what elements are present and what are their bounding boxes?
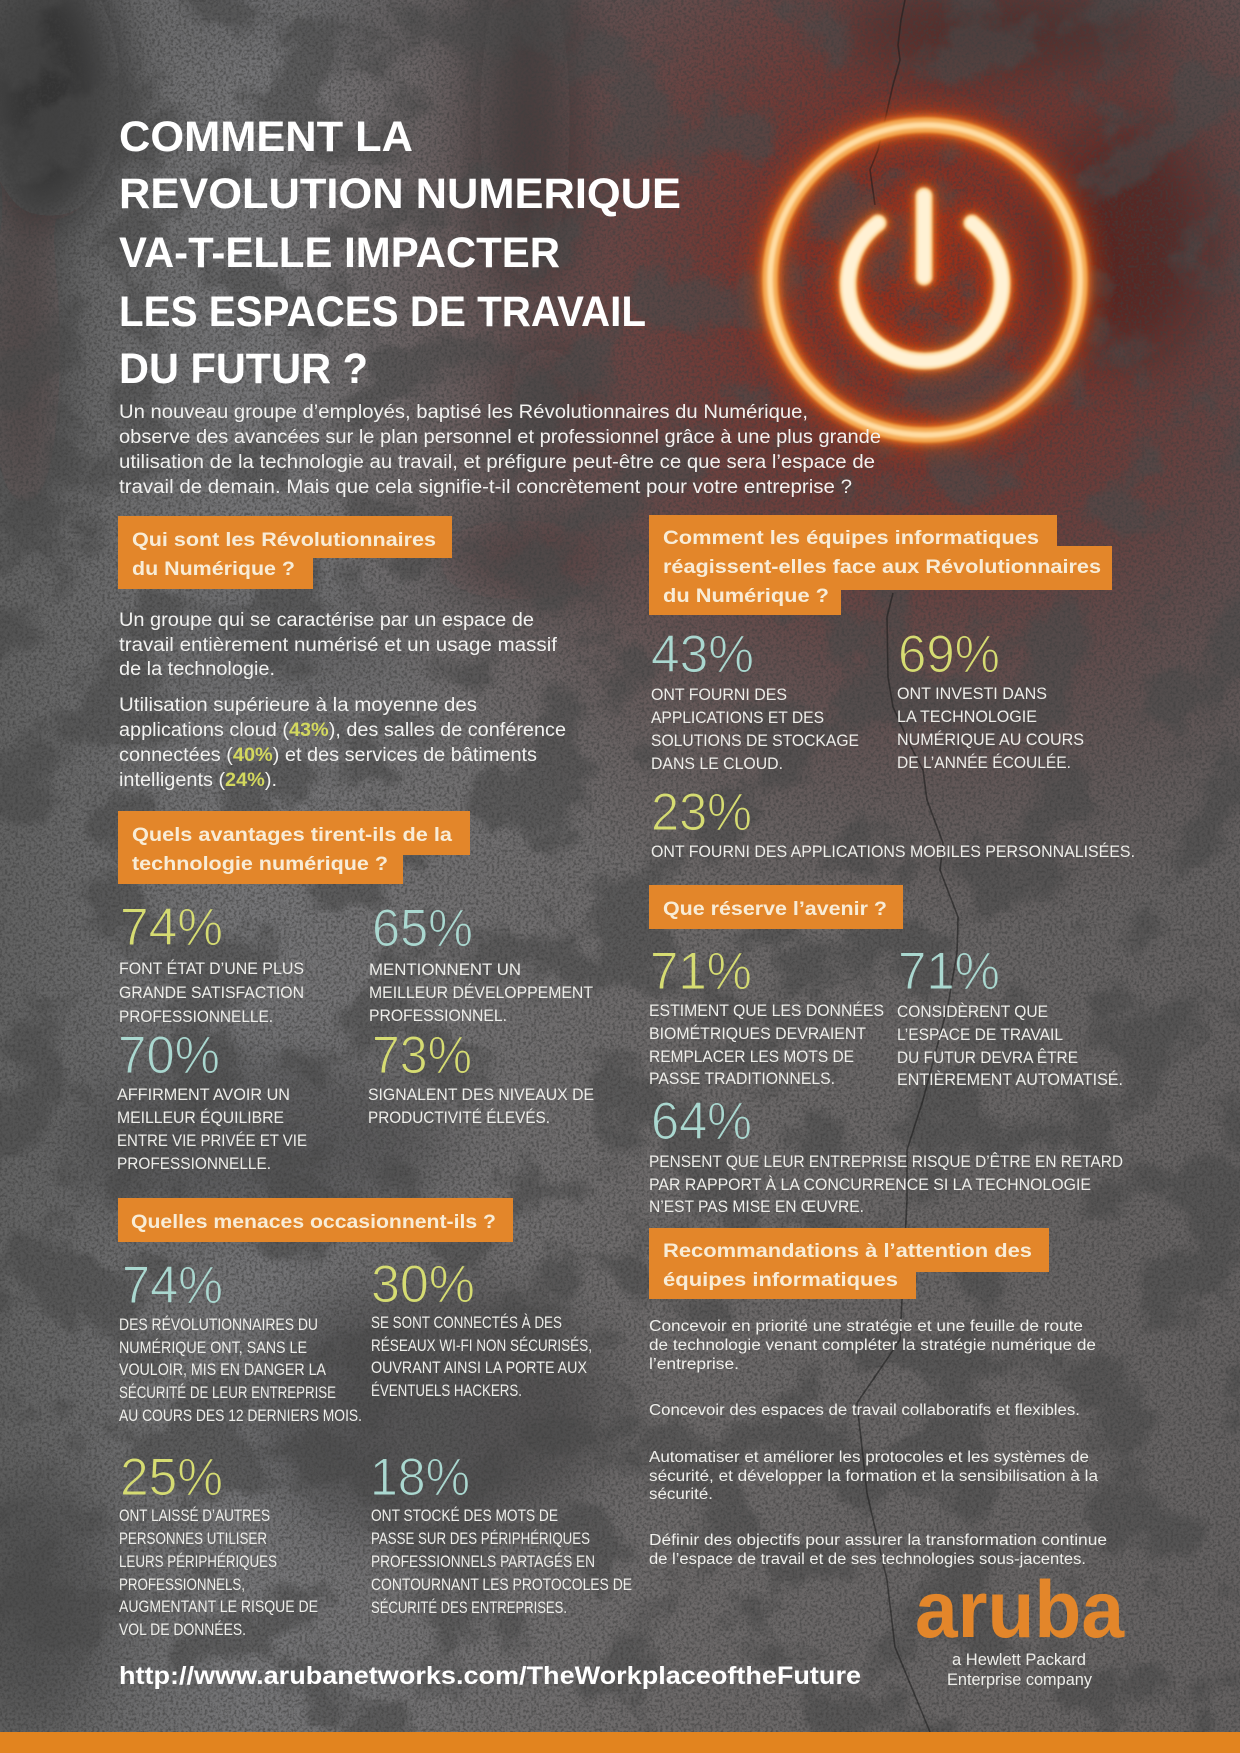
logo: aruba: aruba: [915, 1565, 1125, 1655]
stat: 70% balance: ENTRE VIE PRIVÉE ET VIE: [117, 1131, 307, 1150]
stat: 69% invested: ONT INVESTI DANS: [897, 685, 1047, 703]
stat: 74% satisfaction: 74%: [120, 898, 223, 957]
stat: 71% automated: L’ESPACE DE TRAVAIL: [897, 1026, 1063, 1044]
stat: 71% automated: DU FUTUR DEVRA ÊTRE: [897, 1048, 1078, 1067]
stat: 43% cloud: [651, 625, 859, 773]
stat: 30% unsecured wi-fi: 30%: [371, 1255, 475, 1314]
heading: Recommandations: Recommandations à l’attention des: [663, 1240, 1032, 1262]
stat: 64% competition: PENSENT QUE LEUR ENTREPRISE RISQUE D’ÊTRE EN RETARD: [649, 1152, 1123, 1171]
stat: 69% invested: 69%: [898, 625, 1000, 684]
stat: 71% automated: [897, 942, 1123, 1089]
stat: 74% security risk: NUMÉRIQUE ONT, SANS LE: [119, 1338, 307, 1357]
stat: 69% invested: [897, 625, 1084, 772]
stat: 64% competition: N’EST PAS MISE EN ŒUVRE.: [649, 1198, 864, 1216]
intro paragraph: utilisation de la technologie au travail, et préfigure peut-être ce que sera l’espace de: [119, 452, 875, 473]
stat: 18% stored passwords: PROFESSIONNELS PARTAGÉS EN: [371, 1552, 595, 1571]
stat: 71% automated: 71%: [898, 942, 1000, 1001]
title: DU FUTUR ?: [119, 345, 368, 393]
stat: 64% competition: [649, 1092, 1123, 1216]
stat: 43% cloud: SOLUTIONS DE STOCKAGE: [651, 732, 859, 750]
stat: 70% balance: PROFESSIONNELLE.: [117, 1155, 271, 1173]
stat: 74% security risk: DES RÉVOLUTIONNAIRES DU: [119, 1315, 318, 1334]
stat: 25% shared devices: PROFESSIONNELS,: [119, 1576, 245, 1594]
stat: 65% development: PROFESSIONNEL.: [369, 1007, 507, 1025]
icon: glowing power symbol: [770, 125, 1080, 435]
stat: 25% shared devices: [119, 1448, 318, 1639]
recommendations list: Définir des objectifs pour assurer la transformation continue: [649, 1532, 1107, 1549]
recommendations list: l’entreprise.: [649, 1356, 739, 1373]
website url: http://www.arubanetworks.com/TheWorkplaceoftheFuture: [119, 1662, 861, 1690]
text: who they are: Un groupe qui se caractérise par un espace de: [119, 610, 534, 631]
stat: 30% unsecured wi-fi: [371, 1255, 592, 1400]
title: VA-T-ELLE IMPACTER: [119, 229, 560, 277]
text: who they are: applications cloud ( 43%), des salles de conférence: [119, 720, 566, 741]
stat: 74% security risk: AU COURS DES 12 DERNIERS MOIS.: [119, 1407, 362, 1425]
stat: 30% unsecured wi-fi: SE SONT CONNECTÉS À DES: [371, 1313, 562, 1332]
text: who they are: [119, 610, 566, 791]
stat: 18% stored passwords: 18%: [370, 1448, 470, 1507]
stat: 25% shared devices: PERSONNES UTILISER: [119, 1530, 267, 1548]
text: who they are: intelligents (24%).: [119, 770, 277, 791]
stat: 43% cloud: DANS LE CLOUD.: [651, 755, 783, 773]
logo: aruba: [915, 1565, 1125, 1689]
stat: 30% unsecured wi-fi: ÉVENTUELS HACKERS.: [371, 1381, 522, 1400]
heading: Comment les équipes informatiques: Comment les équipes informatiques: [663, 527, 1039, 549]
stat: 73% productivity: SIGNALENT DES NIVEAUX DE: [368, 1086, 594, 1104]
recommendations list: de technologie venant compléter la stratégie numérique de: [649, 1337, 1096, 1354]
recommendations list: [649, 1318, 1107, 1568]
stat: 69% invested: DE L’ANNÉE ÉCOULÉE.: [897, 753, 1071, 772]
heading: Comment les équipes informatiques: du Numérique ?: [663, 585, 829, 607]
stat: 23% mobile apps: [651, 783, 1135, 861]
heading: Quelles menaces: Quelles menaces occasionnent-ils ?: [131, 1211, 496, 1233]
heading: Recommandations: [649, 1228, 1049, 1299]
logo: aruba: Enterprise company: [947, 1671, 1093, 1689]
stat: 25% shared devices: 25%: [120, 1448, 223, 1507]
intro paragraph: [119, 402, 881, 498]
title: LES ESPACES DE TRAVAIL: [119, 288, 646, 336]
stat: 74% security risk: VOULOIR, MIS EN DANGER LA: [119, 1361, 326, 1379]
stat: 74% satisfaction: PROFESSIONNELLE.: [119, 1008, 273, 1026]
text: who they are: de la technologie.: [119, 659, 275, 680]
stat: 70% balance: 70%: [118, 1026, 220, 1085]
stat: 71% biometrics: [649, 942, 884, 1088]
text: who they are: travail entièrement numérisé et un usage massif: [119, 635, 558, 656]
stat: 74% security risk: [119, 1256, 362, 1425]
heading: Que réserve l'avenir: [649, 885, 903, 929]
stat: 73% productivity: PRODUCTIVITÉ ÉLEVÉS.: [368, 1108, 550, 1127]
stat: 73% productivity: 73%: [372, 1026, 472, 1085]
stat: 71% biometrics: REMPLACER LES MOTS DE: [649, 1048, 854, 1066]
stat: 18% stored passwords: [370, 1448, 632, 1617]
heading: Quels avantages: Quels avantages tirent-ils de la: [132, 824, 452, 846]
stat: 71% biometrics: PASSE TRADITIONNELS.: [649, 1070, 835, 1088]
stat: 71% biometrics: BIOMÉTRIQUES DEVRAIENT: [649, 1024, 866, 1043]
stat: 23% mobile apps: 23%: [651, 783, 752, 842]
stat: 43% cloud: 43%: [651, 625, 754, 684]
stat: 74% satisfaction: GRANDE SATISFACTION: [119, 984, 304, 1002]
recommendations list: Automatiser et améliorer les protocoles et les systèmes de: [649, 1449, 1089, 1466]
stat: 71% biometrics: ESTIMENT QUE LES DONNÉES: [649, 1001, 884, 1020]
stat: 70% balance: [117, 1026, 307, 1173]
stat: 64% competition: 64%: [651, 1092, 752, 1151]
stat: 74% satisfaction: [119, 898, 304, 1026]
stat: 74% security risk: 74%: [122, 1256, 223, 1315]
stat: 25% shared devices: LEURS PÉRIPHÉRIQUES: [119, 1552, 277, 1571]
heading: Quelles menaces: [118, 1198, 513, 1242]
stat: 18% stored passwords: PASSE SUR DES PÉRIPHÉRIQUES: [371, 1529, 590, 1548]
stat: 71% automated: CONSIDÈRENT QUE: [897, 1002, 1048, 1021]
stat: 18% stored passwords: ONT STOCKÉ DES MOTS DE: [371, 1506, 558, 1525]
heading: Recommandations: équipes informatiques: [663, 1269, 898, 1291]
intro paragraph: Un nouveau groupe d’employés, baptisé les Révolutionnaires du Numérique,: [119, 402, 808, 423]
stat: 18% stored passwords: CONTOURNANT LES PROTOCOLES DE: [371, 1576, 632, 1594]
recommendations list: Concevoir en priorité une stratégie et une feuille de route: [649, 1318, 1083, 1335]
heading: Quels avantages: technologie numérique ?: [132, 853, 388, 875]
stat: 25% shared devices: AUGMENTANT LE RISQUE DE: [119, 1598, 318, 1616]
stat: 65% development: 65%: [372, 899, 473, 958]
stat: 70% balance: AFFIRMENT AVOIR UN: [117, 1086, 290, 1104]
heading: Quels avantages: [118, 811, 470, 884]
text: who they are: Utilisation supérieure à la moyenne des: [119, 695, 477, 716]
stat: 30% unsecured wi-fi: RÉSEAUX WI-FI NON SÉCURISÉS,: [371, 1336, 592, 1355]
recommendations list: Concevoir des espaces de travail collaboratifs et flexibles.: [649, 1402, 1080, 1419]
stat: 25% shared devices: VOL DE DONNÉES.: [119, 1620, 246, 1639]
intro paragraph: observe des avancées sur le plan personnel et professionnel grâce à une plus grande: [119, 427, 881, 448]
stat: 65% development: MEILLEUR DÉVELOPPEMENT: [369, 983, 593, 1002]
stat: 43% cloud: APPLICATIONS ET DES: [651, 709, 824, 727]
stat: 70% balance: MEILLEUR ÉQUILIBRE: [117, 1108, 284, 1127]
stat: 65% development: [369, 899, 593, 1025]
footer bar: [0, 1732, 1240, 1753]
stat: 43% cloud: ONT FOURNI DES: [651, 686, 787, 704]
recommendations list: sécurité.: [649, 1486, 713, 1503]
recommendations list: de l’espace de travail et de ses technologies sous-jacentes.: [649, 1551, 1086, 1568]
stat: 74% satisfaction: FONT ÉTAT D’UNE PLUS: [119, 959, 304, 978]
stat: 25% shared devices: ONT LAISSÉ D’AUTRES: [119, 1506, 270, 1525]
heading: Comment les équipes informatiques: [649, 515, 1112, 615]
stat: 64% competition: PAR RAPPORT À LA CONCURRENCE SI LA TECHNOLOGIE: [649, 1175, 1091, 1194]
stat: 65% development: MENTIONNENT UN: [369, 961, 521, 979]
stat: 69% invested: NUMÉRIQUE AU COURS: [897, 730, 1084, 749]
stat: 74% security risk: SÉCURITÉ DE LEUR ENTREPRISE: [119, 1383, 336, 1402]
heading: Qui sont les Révolutionnaires: Qui sont les Révolutionnaires: [132, 529, 436, 551]
heading: Que réserve l'avenir: Que réserve l’avenir ?: [663, 898, 887, 920]
stat: 30% unsecured wi-fi: OUVRANT AINSI LA PORTE AUX: [371, 1359, 587, 1377]
stat: 18% stored passwords: SÉCURITÉ DES ENTREPRISES.: [371, 1598, 567, 1617]
stat: 73% productivity: [368, 1026, 594, 1127]
title: REVOLUTION NUMERIQUE: [119, 170, 681, 218]
text: who they are: connectées ( 40%) et des services de bâtiments: [119, 745, 537, 766]
intro paragraph: travail de demain. Mais que cela signifie-t-il concrètement pour votre entreprise ?: [119, 477, 852, 498]
stat: 71% automated: ENTIÈREMENT AUTOMATISÉ.: [897, 1070, 1123, 1089]
title: [119, 113, 681, 393]
stat: 71% biometrics: 71%: [650, 942, 752, 1001]
logo: aruba: a Hewlett Packard: [952, 1651, 1086, 1669]
heading: Comment les équipes informatiques: réagissent-elles face aux Révolutionnaires: [663, 556, 1101, 578]
recommendations list: sécurité, et développer la formation et la sensibilisation à la: [649, 1468, 1098, 1485]
stat: 23% mobile apps: ONT FOURNI DES APPLICATIONS MOBILES PERSONNALISÉES.: [651, 842, 1135, 861]
stat: 69% invested: LA TECHNOLOGIE: [897, 708, 1037, 726]
heading: Qui sont les Révolutionnaires: du Numérique ?: [132, 558, 295, 580]
title: COMMENT LA: [119, 113, 413, 161]
heading: Qui sont les Révolutionnaires: [118, 516, 452, 589]
